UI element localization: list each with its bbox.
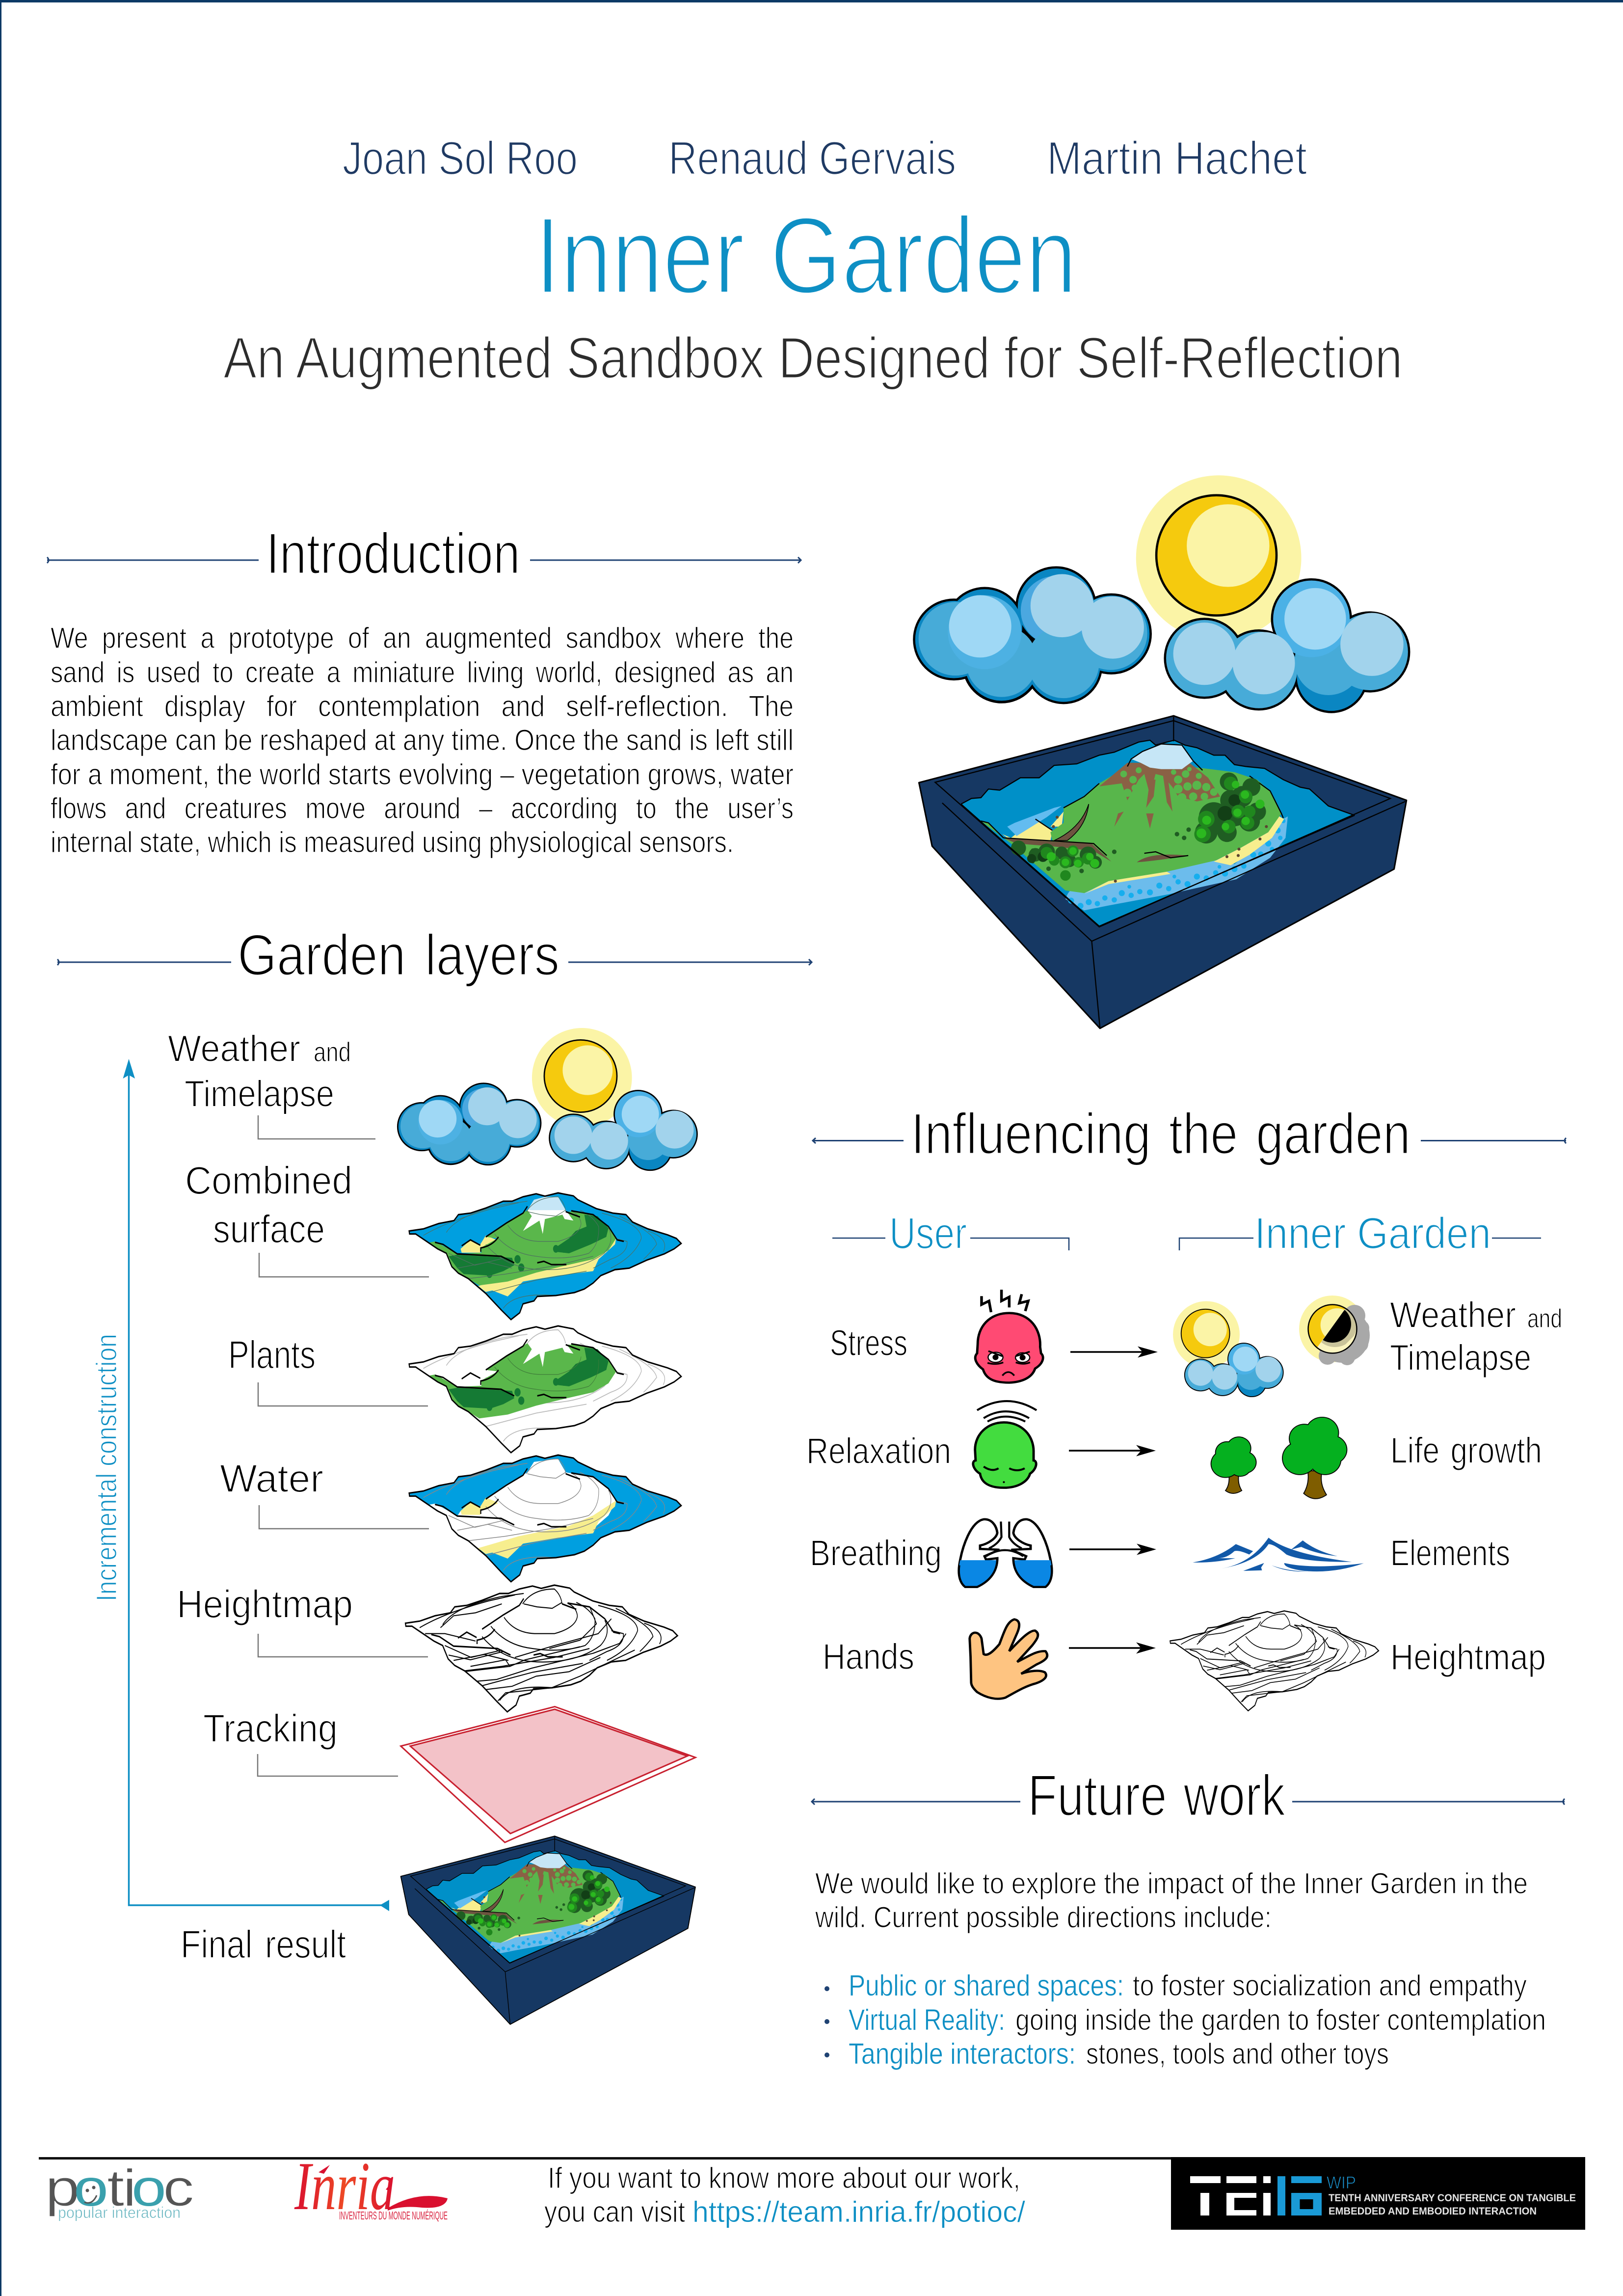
row labels: user: Relaxation [806,1431,951,1471]
arrow: hands to heightmap [1069,1643,1156,1653]
layer label: combined surface: surface [213,1207,325,1251]
layer: tracking [401,1706,695,1842]
layer label: final result: Final result [181,1922,346,1966]
footer text with link: you can visit [544,2195,685,2228]
icon: sun with cloud [1173,1301,1284,1397]
layer label: tracking: Tracking [203,1706,338,1750]
future work list: stones, tools and other toys [1086,2037,1389,2070]
layer label: combined surface: Combined [185,1159,352,1202]
logo: potioc: popular interaction [58,2204,181,2221]
row labels: inner garden: Heightmap [1390,1637,1546,1677]
introduction text: ambient display for contemplation and self-reflection. The [51,690,794,723]
layer: final result sandbox [401,1836,695,2025]
future work text: wild. Current possible directions include: [815,1901,1272,1934]
icon: heightmap [1170,1611,1379,1711]
row labels: user [806,1323,951,1677]
arrow: stress to weather [1070,1346,1158,1358]
authors: Joan Sol Roo [343,132,578,185]
future work list [825,1969,1546,2070]
icon: lungs [959,1519,1052,1587]
row labels: inner garden: Timelapse [1390,1337,1531,1378]
authors [343,132,1307,185]
layer label: weather and timelapse: Weather [168,1028,300,1070]
layer label: weather and timelapse: Timelapse [185,1073,334,1115]
layer label: plants: Plants [228,1333,316,1377]
layer label: weather and timelapse: and [314,1036,351,1067]
heading: future work: Future work [1028,1763,1286,1828]
icon: elements waves [1193,1538,1364,1571]
logo: TEI 16 WIP [1171,2157,1585,2230]
arrow: breathing to elements [1069,1543,1156,1555]
introduction text: sand is used to create a miniature living world, designed as an [51,656,794,689]
icon: eclipse timelapse [1299,1296,1370,1365]
introduction text: flows and creatures move around – according to the user’s [51,792,794,825]
future work list: Public or shared spaces: [849,1969,1124,2002]
icon: trees [1211,1417,1347,1499]
layer: combined surface [409,1193,681,1320]
row labels: user: Stress [830,1323,907,1363]
layer label: plants [228,1333,428,1406]
row labels: inner garden: and [1527,1304,1562,1333]
icon: right cloud [1164,578,1410,713]
footer text with link: If you want to know more about our work, [548,2161,1020,2194]
authors: Martin Hachet [1047,132,1307,185]
icon: relaxed head [973,1401,1037,1488]
introduction text: internal state, which is measured using physiological sensors. [51,826,734,859]
arrow: relaxation to life [1069,1445,1156,1456]
column header: user [832,1209,1069,1258]
logo: inria: INVENTEURS DU MONDE NUMÉRIQUE [339,2209,448,2222]
arrow: incremental construction [91,1059,389,1911]
introduction text: for a moment, the world starts evolving – vegetation grows, water [51,758,794,791]
logo: potioc: potioc [45,2159,194,2217]
heading: future work [812,1763,1565,1828]
future work text [815,1867,1528,1934]
future work list: Virtual Reality: [849,2003,1005,2036]
illustration: sun and clouds over sandbox [913,475,1410,1028]
introduction text [51,621,794,859]
introduction text: landscape can be reshaped at any time. Once the sand is left still [51,724,794,756]
heading: garden layers [57,923,812,988]
layer label: heightmap: Heightmap [177,1582,353,1626]
layer label: weather and timelapse [168,1028,375,1139]
logo: TEI 16 WIP: WIP [1327,2173,1356,2192]
layer label: water [220,1457,429,1529]
future work list: to foster socialization and empathy [1133,1969,1527,2002]
heading: introduction: Introduction [266,521,520,586]
future work list: Tangible interactors: [849,2037,1076,2070]
row labels: inner garden [1390,1295,1562,1677]
layer label: tracking [203,1706,398,1776]
icon: sun [1136,475,1302,641]
footer text with link [544,2161,1025,2228]
column header: user: User [889,1209,967,1258]
row labels: inner garden: Elements [1390,1533,1510,1573]
row labels: inner garden: Life growth [1390,1430,1542,1471]
title: Inner Garden [535,195,1077,317]
introduction text: We present a prototype of an augmented sandbox where the [51,621,794,654]
future work list: going inside the garden to foster contemplation [1015,2003,1546,2036]
future work text: We would like to explore the impact of the Inner Garden in the [815,1867,1528,1900]
icon: left cloud [913,566,1152,704]
row labels: inner garden: Weather [1390,1295,1516,1335]
icon: stressed head [975,1290,1043,1382]
footer rule [39,2157,1172,2160]
column header: inner garden: Inner Garden [1254,1209,1491,1258]
layer: heightmap [405,1585,677,1712]
heading: influencing the garden: Influencing the garden [911,1102,1410,1166]
heading: introduction [47,521,801,586]
layer: plants [409,1326,681,1453]
footer text with link: https://team.inria.fr/potioc/ [692,2195,1025,2228]
layer: weather [397,1028,698,1171]
logo: TEI 16 WIP: TENTH ANNIVERSARY CONFERENCE ON TANGIBLE [1329,2192,1576,2204]
row labels: user: Hands [823,1636,914,1677]
layer label: heightmap [177,1582,428,1657]
layer label: water: Water [220,1457,323,1500]
subtitle: An Augmented Sandbox Designed for Self-Reflection [223,325,1403,391]
arrow: incremental construction: Incremental construction [91,1334,123,1601]
layer label: combined surface [185,1159,429,1277]
layer: water [409,1455,681,1582]
row labels: user: Breathing [810,1533,942,1573]
icon: hand [970,1620,1047,1699]
logo: inria: Inria [294,2148,395,2224]
logo: TEI 16 WIP: EMBEDDED AND EMBODIED INTERACTION [1329,2206,1537,2217]
authors: Renaud Gervais [668,132,956,185]
heading: garden layers: Garden layers [238,923,559,988]
sandbox with island [919,716,1407,1028]
